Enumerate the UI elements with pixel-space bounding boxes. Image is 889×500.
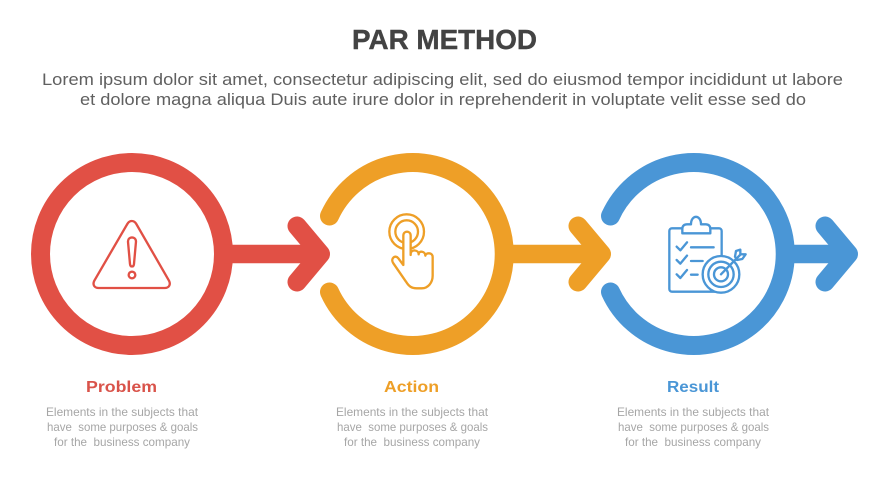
subtitle text block: Lorem ipsum dolor sit amet, consectetur adipiscing elit, sed do eiusmod tempor incididunt ut labore (42, 70, 843, 89)
description: problem (46, 405, 199, 449)
panel: action text (336, 379, 489, 449)
closed ring: problem (40, 162, 224, 346)
arrow: result outgoing (786, 226, 848, 282)
open ring: action (330, 162, 504, 346)
description: result: Elements in the subjects that (617, 405, 770, 419)
title: PAR METHOD (352, 24, 537, 55)
description: problem: have some purposes & goals (47, 420, 198, 434)
panel: action step graphic (330, 162, 602, 346)
subtitle text block: et dolore magna aliqua Duis aute irure dolor in reprehenderit in voluptate velit esse sed do (80, 90, 806, 109)
description: action: for the business company (344, 435, 480, 449)
heading: result: Result (667, 379, 720, 396)
panel: result step graphic (610, 162, 848, 346)
subtitle text block (42, 70, 843, 109)
description: result (617, 405, 770, 449)
icon: clipboard with target (669, 217, 746, 293)
arrow: action to result (505, 226, 602, 282)
panel: problem step graphic (40, 162, 320, 346)
open ring: result (610, 162, 785, 346)
icon: pointing hand (389, 214, 433, 288)
panel: result text (617, 379, 770, 449)
description: action: have some purposes & goals (337, 420, 488, 434)
heading: action: Action (384, 379, 439, 396)
description: action: Elements in the subjects that (336, 405, 489, 419)
icon: warning triangle (94, 221, 170, 288)
description: problem: Elements in the subjects that (46, 405, 199, 419)
panel: problem text (46, 379, 199, 449)
description: result: have some purposes & goals (618, 420, 769, 434)
description: problem: for the business company (54, 435, 190, 449)
description: result: for the business company (625, 435, 761, 449)
arrow: problem to action (224, 226, 320, 282)
heading: problem: Problem (86, 379, 157, 396)
description: action (336, 405, 489, 449)
